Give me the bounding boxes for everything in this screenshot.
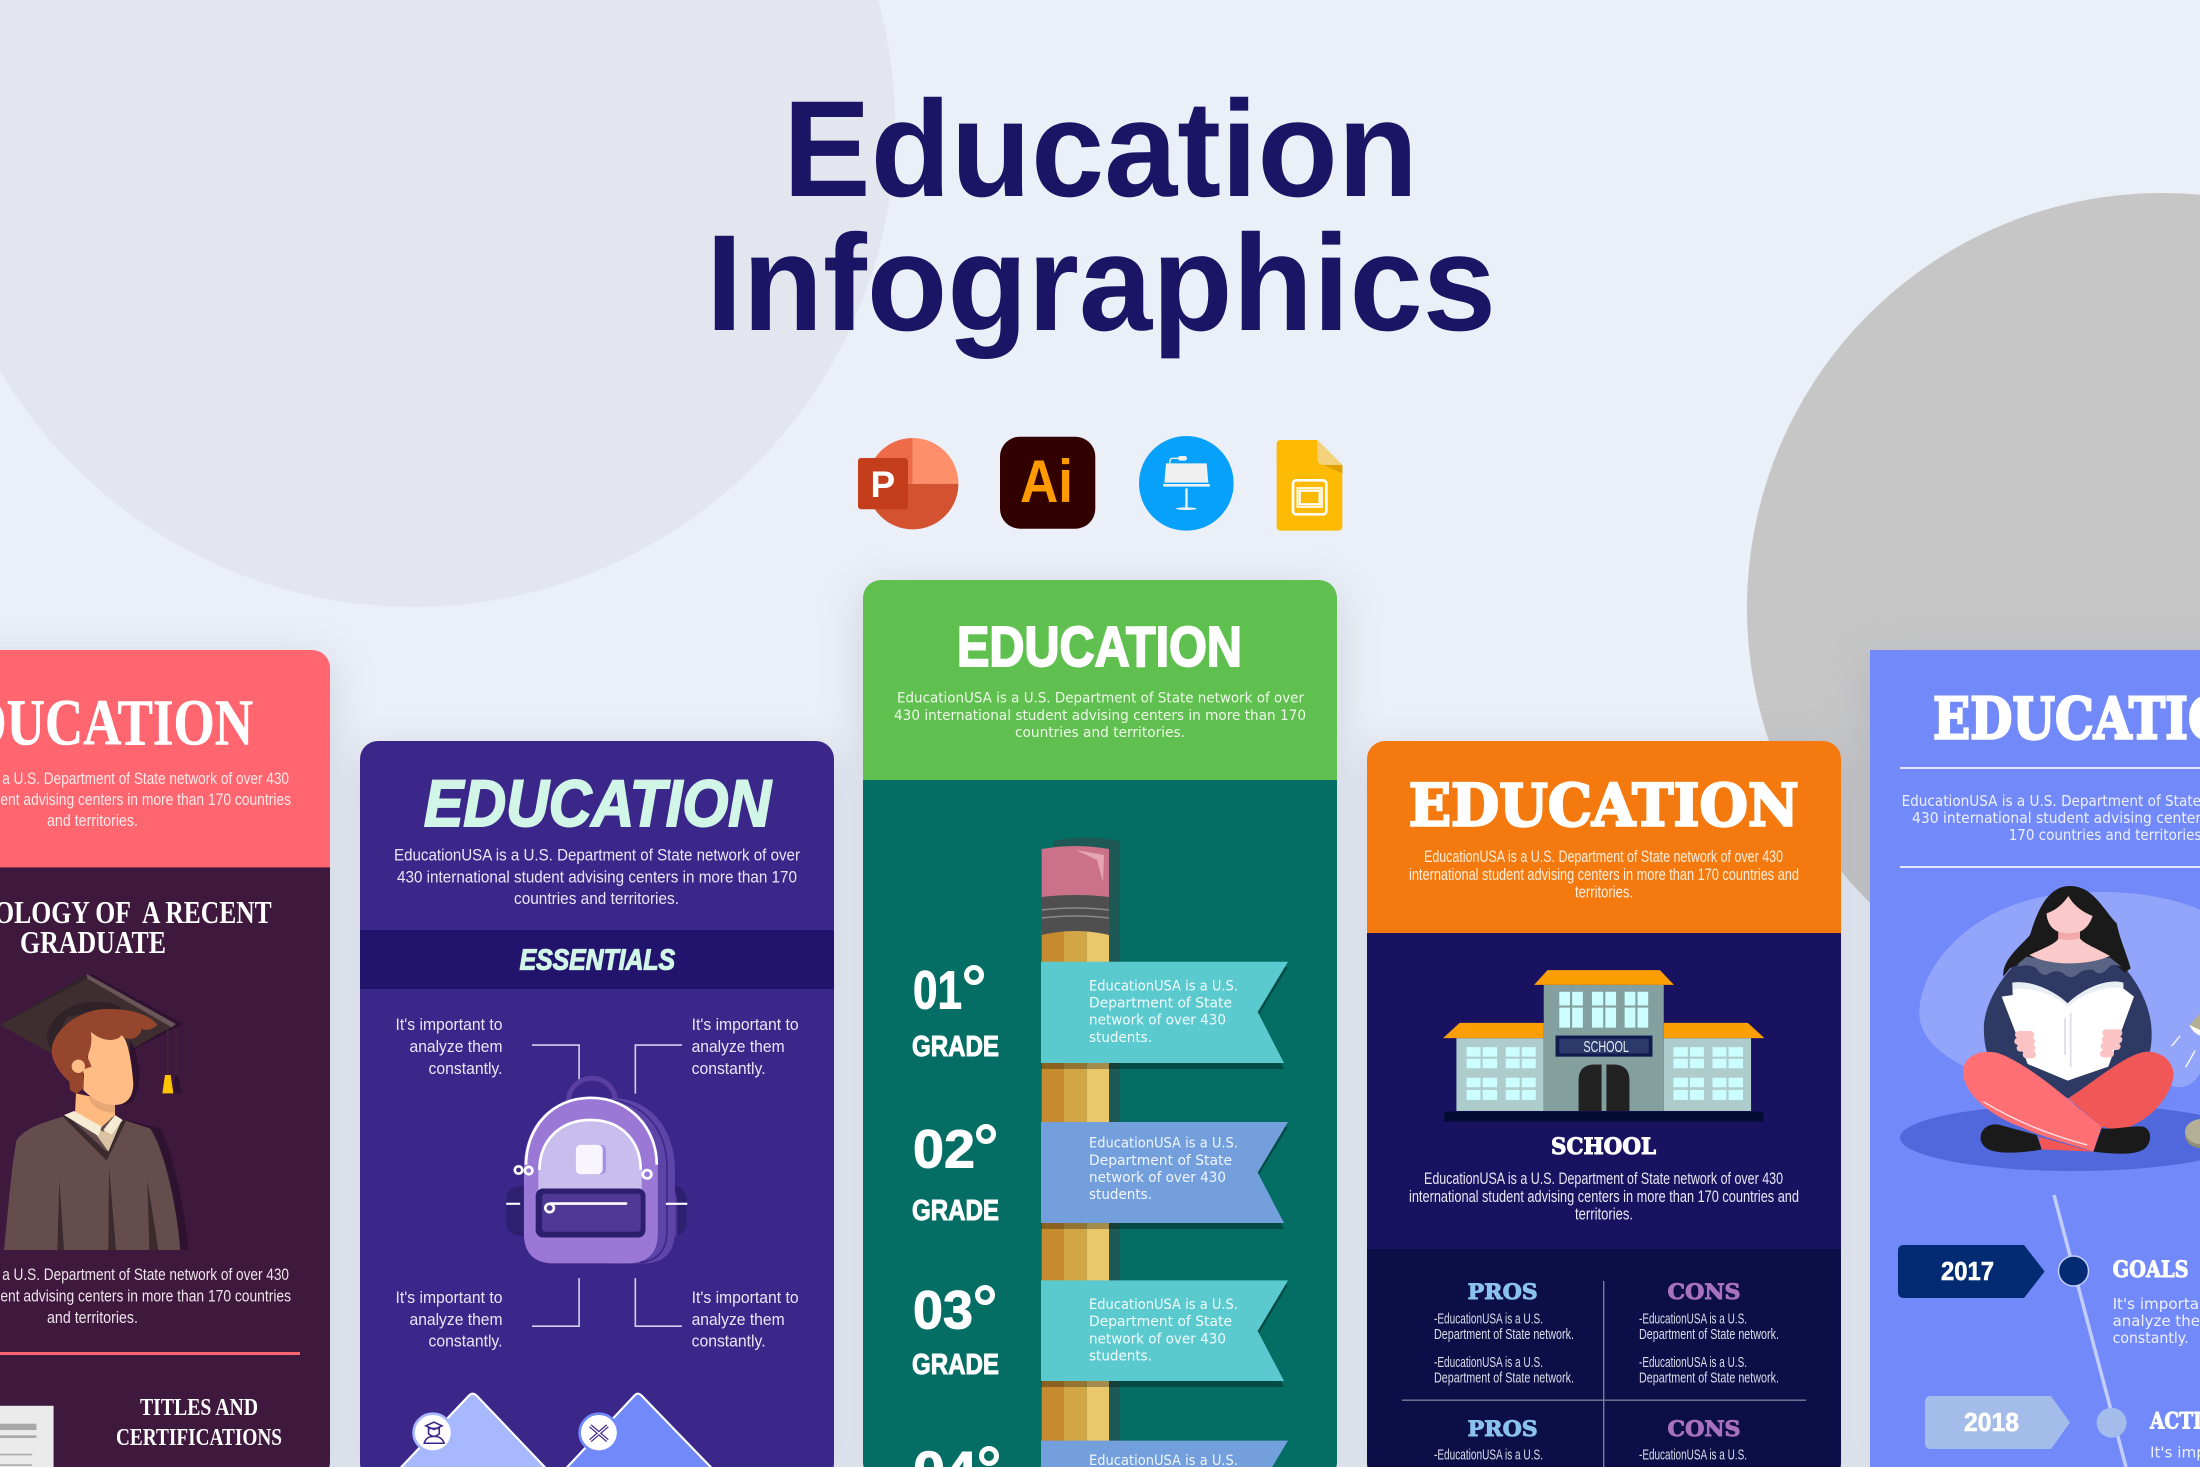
heading: biology: A RECENT [142,894,272,930]
icon: Illustrator [1000,437,1095,529]
icon: certificate [0,1406,54,1467]
grade labels: GRADE [912,1195,999,1227]
ribbon 1: students. [1089,1030,1152,1046]
timeline line [2054,1195,2126,1467]
pros 2: -EducationUSA is a U.S. [1434,1448,1543,1464]
callout: top right: It's important to [692,1016,799,1034]
ribbon 2: EducationUSA is a U.S. [1089,1136,1238,1152]
text block: school description: territories. [1575,1205,1633,1224]
text block: description: countries and territories. [514,890,679,908]
grade labels: GRADE [912,1031,999,1063]
callout: bottom right [692,1289,799,1351]
illustration: woman reading [1900,886,2200,1171]
panel: red biography card [0,650,330,1467]
ribbon 3: network of over 430 [1089,1332,1226,1348]
title: Infographics [706,207,1496,360]
text block: school description [1409,1169,1799,1224]
callout: top right: constantly. [692,1060,766,1078]
ribbon 3: Department of State [1089,1314,1232,1330]
heading: education: EDUCATION [1409,772,1799,840]
panel: purple essentials card [360,741,834,1467]
pros 1: PROS [1468,1279,1538,1304]
text block: dark description [1,1268,291,1323]
heading: titles and certifications: TITLES AND [140,1395,258,1421]
pros 1: Department of State network. [1434,1327,1574,1343]
panel: green grades card [863,580,1337,1467]
text block: description: EducationUSA is a U.S. Department of State network of over [394,846,800,864]
text block: school description: EducationUSA is a U.S. Department of State network of over 430 [1424,1169,1783,1188]
heading: biology [0,902,272,954]
cons 2 [1639,1416,1747,1464]
cons 1: -EducationUSA is a U.S. [1639,1312,1747,1328]
ribbon 3: EducationUSA is a U.S. [1089,1297,1238,1313]
illustration: school building: SCHOOL [1583,1039,1629,1056]
icon: Google Slides [1277,440,1342,531]
background circle: right [1747,193,2200,1023]
ribbon 2: students. [1089,1187,1152,1203]
callout: top right: analyze them [692,1038,785,1056]
heading: biology: GRADUATE [20,924,166,960]
pros 1 [1434,1279,1574,1387]
cons 2: -EducationUSA is a U.S. [1639,1448,1747,1464]
timeline 2018 [1925,1396,2127,1449]
icon: Keynote [1139,436,1234,531]
cons 1 [1639,1279,1779,1387]
text block: red header description: and territories. [47,811,138,830]
pros 2: PROS [1468,1416,1538,1441]
callout: top left [396,1016,502,1078]
timeline 2017: 2017 [1941,1256,1994,1286]
text block: description: 430 international student advising centers in more than 170 [397,869,797,887]
text block: dark description: and territories. [47,1308,138,1327]
card shadows [0,590,2200,1467]
ribbon 4 [1041,1441,1288,1467]
text block: goals: constantly. [2113,1329,2189,1347]
panel: blue timeline card [1870,650,2200,1467]
text block: description [894,691,1306,741]
text block: school description: international student advising centers in more than 170 countries and [1409,1187,1799,1206]
ribbon 1: EducationUSA is a U.S. [1089,978,1238,994]
text block: description: EducationUSA is a U.S. Department of State network of over [897,691,1304,707]
callout: bottom right: constantly. [692,1333,766,1351]
cons 1: Department of State network. [1639,1371,1779,1387]
cons 1: -EducationUSA is a U.S. [1639,1355,1747,1371]
grade labels: GRADE [912,1349,999,1381]
pros 1: Department of State network. [1434,1371,1574,1387]
text block: orange description: territories. [1575,882,1633,901]
timeline 2017 [1898,1245,2088,1298]
illustration: backpack with connectors [506,1045,687,1326]
text block: orange description: international student advising centers in more than 170 countries and [1409,865,1799,884]
heading: school: SCHOOL [1551,1134,1656,1160]
grade labels [912,961,999,1467]
illustration: graduate [0,973,189,1250]
heading: essentials: ESSENTIALS [520,945,676,977]
grade labels: 01 [913,961,962,1021]
callout: top left: analyze them [410,1038,502,1056]
cons 2: CONS [1668,1416,1740,1441]
text block: orange description [1409,847,1799,901]
text block: description [395,848,800,904]
illustration: pencil [1042,838,1120,1467]
text block: description [1902,792,2200,844]
callout: bottom left: It's important to [396,1289,502,1307]
callout: top left: constantly. [428,1060,502,1078]
ribbon 1 [1041,962,1288,1069]
timeline 2018: 2018 [1964,1407,2019,1437]
ribbon 3 [1041,1280,1288,1387]
background circle: left [0,0,895,607]
icon: PowerPoint [858,438,958,529]
text block: goals: GOALS [2113,1257,2189,1283]
text block: orange description: EducationUSA is a U.S. Department of State network of over 430 [1424,847,1783,866]
text block: goals [2113,1257,2200,1347]
icon: PowerPoint: P [870,464,895,505]
callout: bottom left: constantly. [428,1333,502,1351]
ribbon 1: Department of State [1089,996,1232,1012]
cons 1: CONS [1668,1279,1740,1304]
callout: bottom right: analyze them [692,1311,785,1329]
cons 1: Department of State network. [1639,1327,1779,1343]
ribbon 1: network of over 430 [1089,1013,1226,1029]
heading: education: EDUCATION [957,615,1242,679]
ribbon 2: Department of State [1089,1153,1232,1169]
pros 2 [1434,1416,1543,1464]
grade labels: 02 [913,1120,975,1180]
ribbon 2: network of over 430 [1089,1170,1226,1186]
heading: titles and certifications: CERTIFICATIONS [116,1425,282,1451]
panel: orange school card [1367,741,1841,1467]
icon: Illustrator: Ai [1020,448,1073,515]
pros 1: -EducationUSA is a U.S. [1434,1312,1543,1328]
illustration: school building [1443,970,1764,1122]
callout: bottom right: It's important to [692,1289,799,1307]
heading: education: EDUCATION [424,766,772,840]
callout: top left: It's important to [396,1016,502,1034]
chart: mountain shapes with icons [395,1394,717,1467]
title: Education [783,73,1418,226]
text block: action [2149,1408,2200,1462]
ribbon 3: students. [1089,1349,1152,1365]
pros 1: -EducationUSA is a U.S. [1434,1355,1543,1371]
text block: description: 430 international student advising centers in more than 170 [894,708,1306,724]
text block: red header description [1,772,290,826]
callout: top right [692,1016,799,1078]
callout: bottom left [396,1289,502,1351]
title [706,73,1496,360]
grade labels: 03 [913,1280,973,1340]
heading: titles and certifications [116,1399,282,1445]
ribbon 2 [1041,1122,1288,1229]
callout: bottom left: analyze them [410,1311,502,1329]
illustration: lamp at edge [2172,1013,2200,1148]
text block: description: countries and territories. [1015,725,1185,741]
